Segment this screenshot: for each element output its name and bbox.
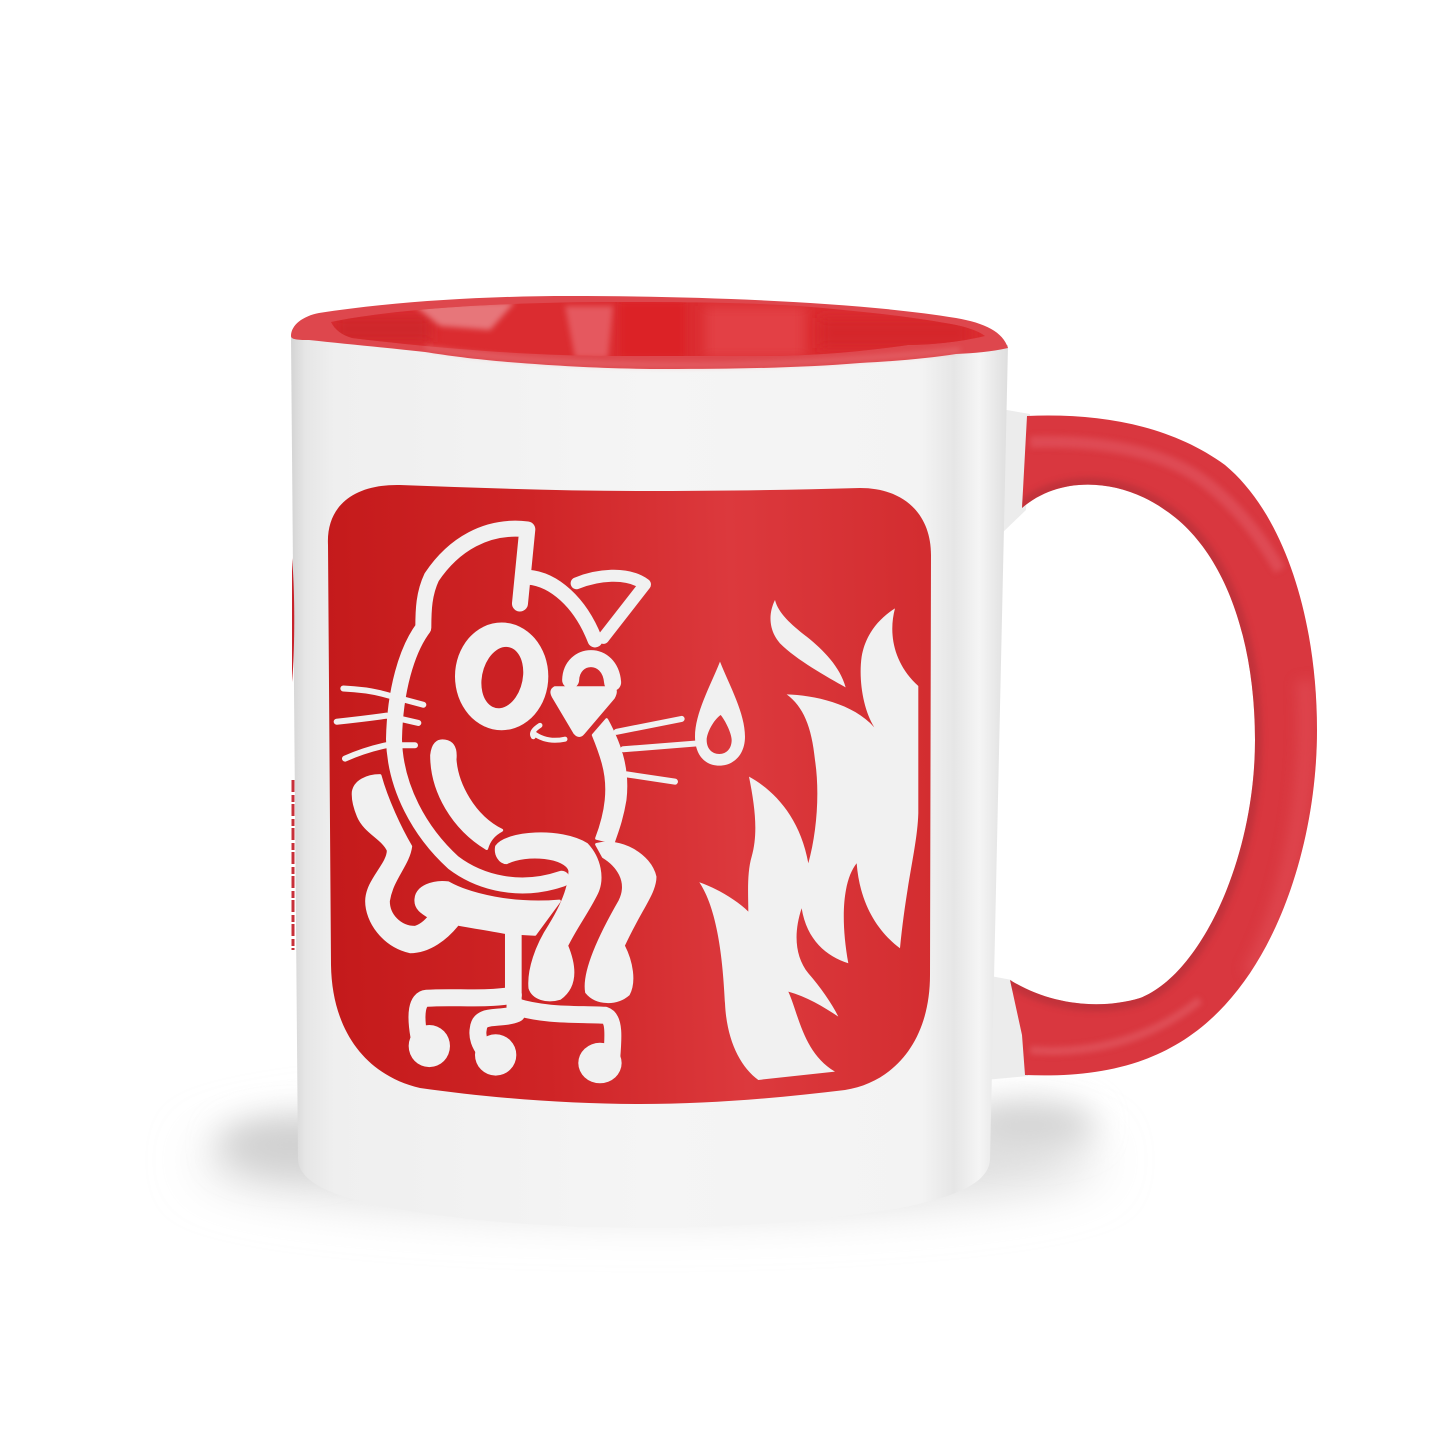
chair seat — [416, 882, 559, 934]
right ear — [577, 576, 645, 638]
chair base — [417, 995, 613, 1059]
back leg — [586, 843, 655, 1002]
rim inner bowl — [331, 302, 985, 356]
mug body — [291, 335, 1008, 1228]
chair wheels — [409, 1025, 622, 1083]
nose — [552, 688, 615, 735]
chair back and armrest — [353, 776, 457, 952]
main flames — [699, 608, 918, 1080]
left eye — [455, 623, 548, 730]
water drop and flames — [695, 600, 918, 1080]
mug red rim — [291, 296, 1008, 369]
rim outer — [291, 296, 1008, 369]
ground shadow — [200, 1101, 1100, 1210]
winking right eye — [571, 659, 613, 682]
chair post — [505, 933, 522, 1002]
cat chest — [593, 720, 626, 842]
front leg — [496, 834, 600, 1000]
wraparound design sliver on left edge — [292, 558, 294, 950]
arm — [432, 741, 502, 848]
handle white stubs — [985, 408, 1030, 1080]
inner ear line — [528, 577, 595, 640]
cat on chair — [337, 529, 700, 1083]
water drop — [695, 662, 745, 766]
cat head and back — [394, 529, 562, 885]
rim highlight — [425, 347, 960, 365]
red rounded panel — [328, 485, 931, 1104]
handle — [985, 405, 1325, 1085]
mouth — [532, 725, 565, 740]
mug illustration — [199, 296, 1317, 1228]
whiskers — [337, 689, 700, 782]
handle red loop — [1005, 405, 1325, 1085]
small flame leaf — [770, 600, 846, 687]
